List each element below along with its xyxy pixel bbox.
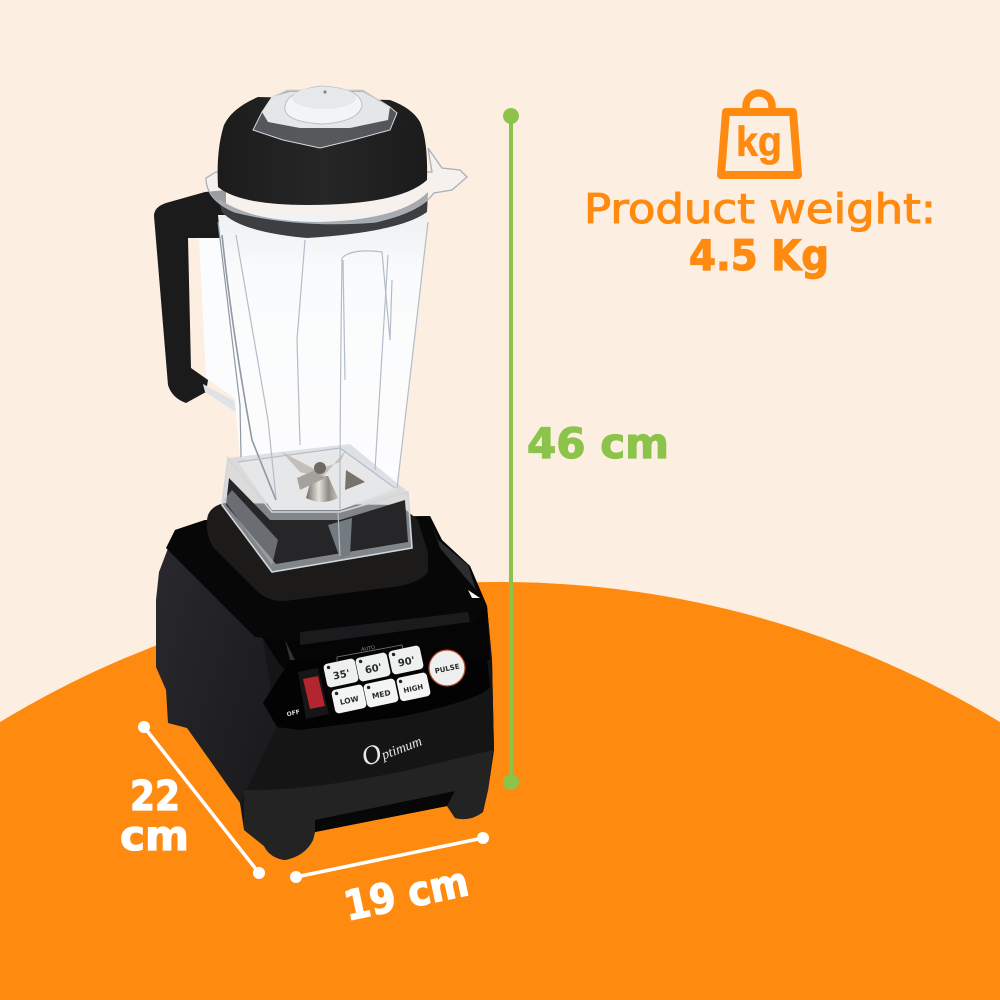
auto bracket: AUTO — [361, 645, 376, 653]
button 60: 60' — [364, 662, 383, 677]
off label: OFF — [286, 709, 301, 718]
icon: weight bag: kg — [736, 118, 782, 165]
button med: MED — [371, 688, 391, 701]
handle window — [199, 238, 240, 402]
jar outlines and ribs — [218, 222, 428, 572]
depth label: cm — [120, 812, 189, 860]
depth label: 22 — [130, 772, 180, 820]
button 35: 35' — [332, 668, 351, 683]
pulse button: PULSE — [434, 662, 461, 676]
jar pad — [207, 503, 428, 601]
button low — [331, 684, 367, 714]
blade assembly — [282, 450, 365, 502]
button 60 — [355, 652, 391, 682]
jar floor — [238, 448, 395, 510]
depth label — [120, 772, 189, 860]
height label: 46 cm — [527, 419, 669, 468]
dark seal under lid — [218, 192, 428, 238]
button 90: 90' — [397, 655, 416, 670]
brand logo: Optimum — [357, 722, 425, 772]
base lower band — [244, 750, 493, 860]
button med — [363, 678, 399, 708]
lid plug — [253, 86, 397, 148]
motor base side — [156, 516, 494, 860]
specular highlight — [468, 590, 480, 598]
base glossy top — [166, 516, 487, 640]
button high — [396, 672, 431, 702]
button low: LOW — [339, 694, 360, 707]
auto bracket — [337, 645, 403, 661]
weight value: 4.5 Kg — [689, 231, 829, 280]
power switch — [298, 668, 329, 719]
depth dimension line — [138, 721, 265, 879]
button 35 — [323, 658, 359, 688]
base notch shadow — [315, 791, 455, 832]
jar base — [222, 444, 412, 572]
blender product image — [154, 86, 494, 860]
control panel — [263, 658, 490, 730]
jar rim — [206, 148, 467, 224]
button 90 — [388, 645, 424, 675]
base front face — [240, 606, 494, 825]
height dimension line — [503, 108, 519, 790]
lid — [218, 97, 427, 205]
control panel hood — [262, 606, 490, 680]
jar body — [218, 215, 428, 510]
width dimension line — [290, 832, 489, 883]
handle — [154, 190, 226, 403]
orange curved ground — [0, 582, 1000, 1000]
icon: weight bag — [721, 93, 798, 175]
jar base dark interior — [226, 478, 408, 564]
product weight label: Product weight: — [584, 185, 936, 233]
width label: 19 cm — [340, 857, 473, 931]
pulse button — [429, 650, 465, 686]
button high: HIGH — [403, 683, 424, 695]
